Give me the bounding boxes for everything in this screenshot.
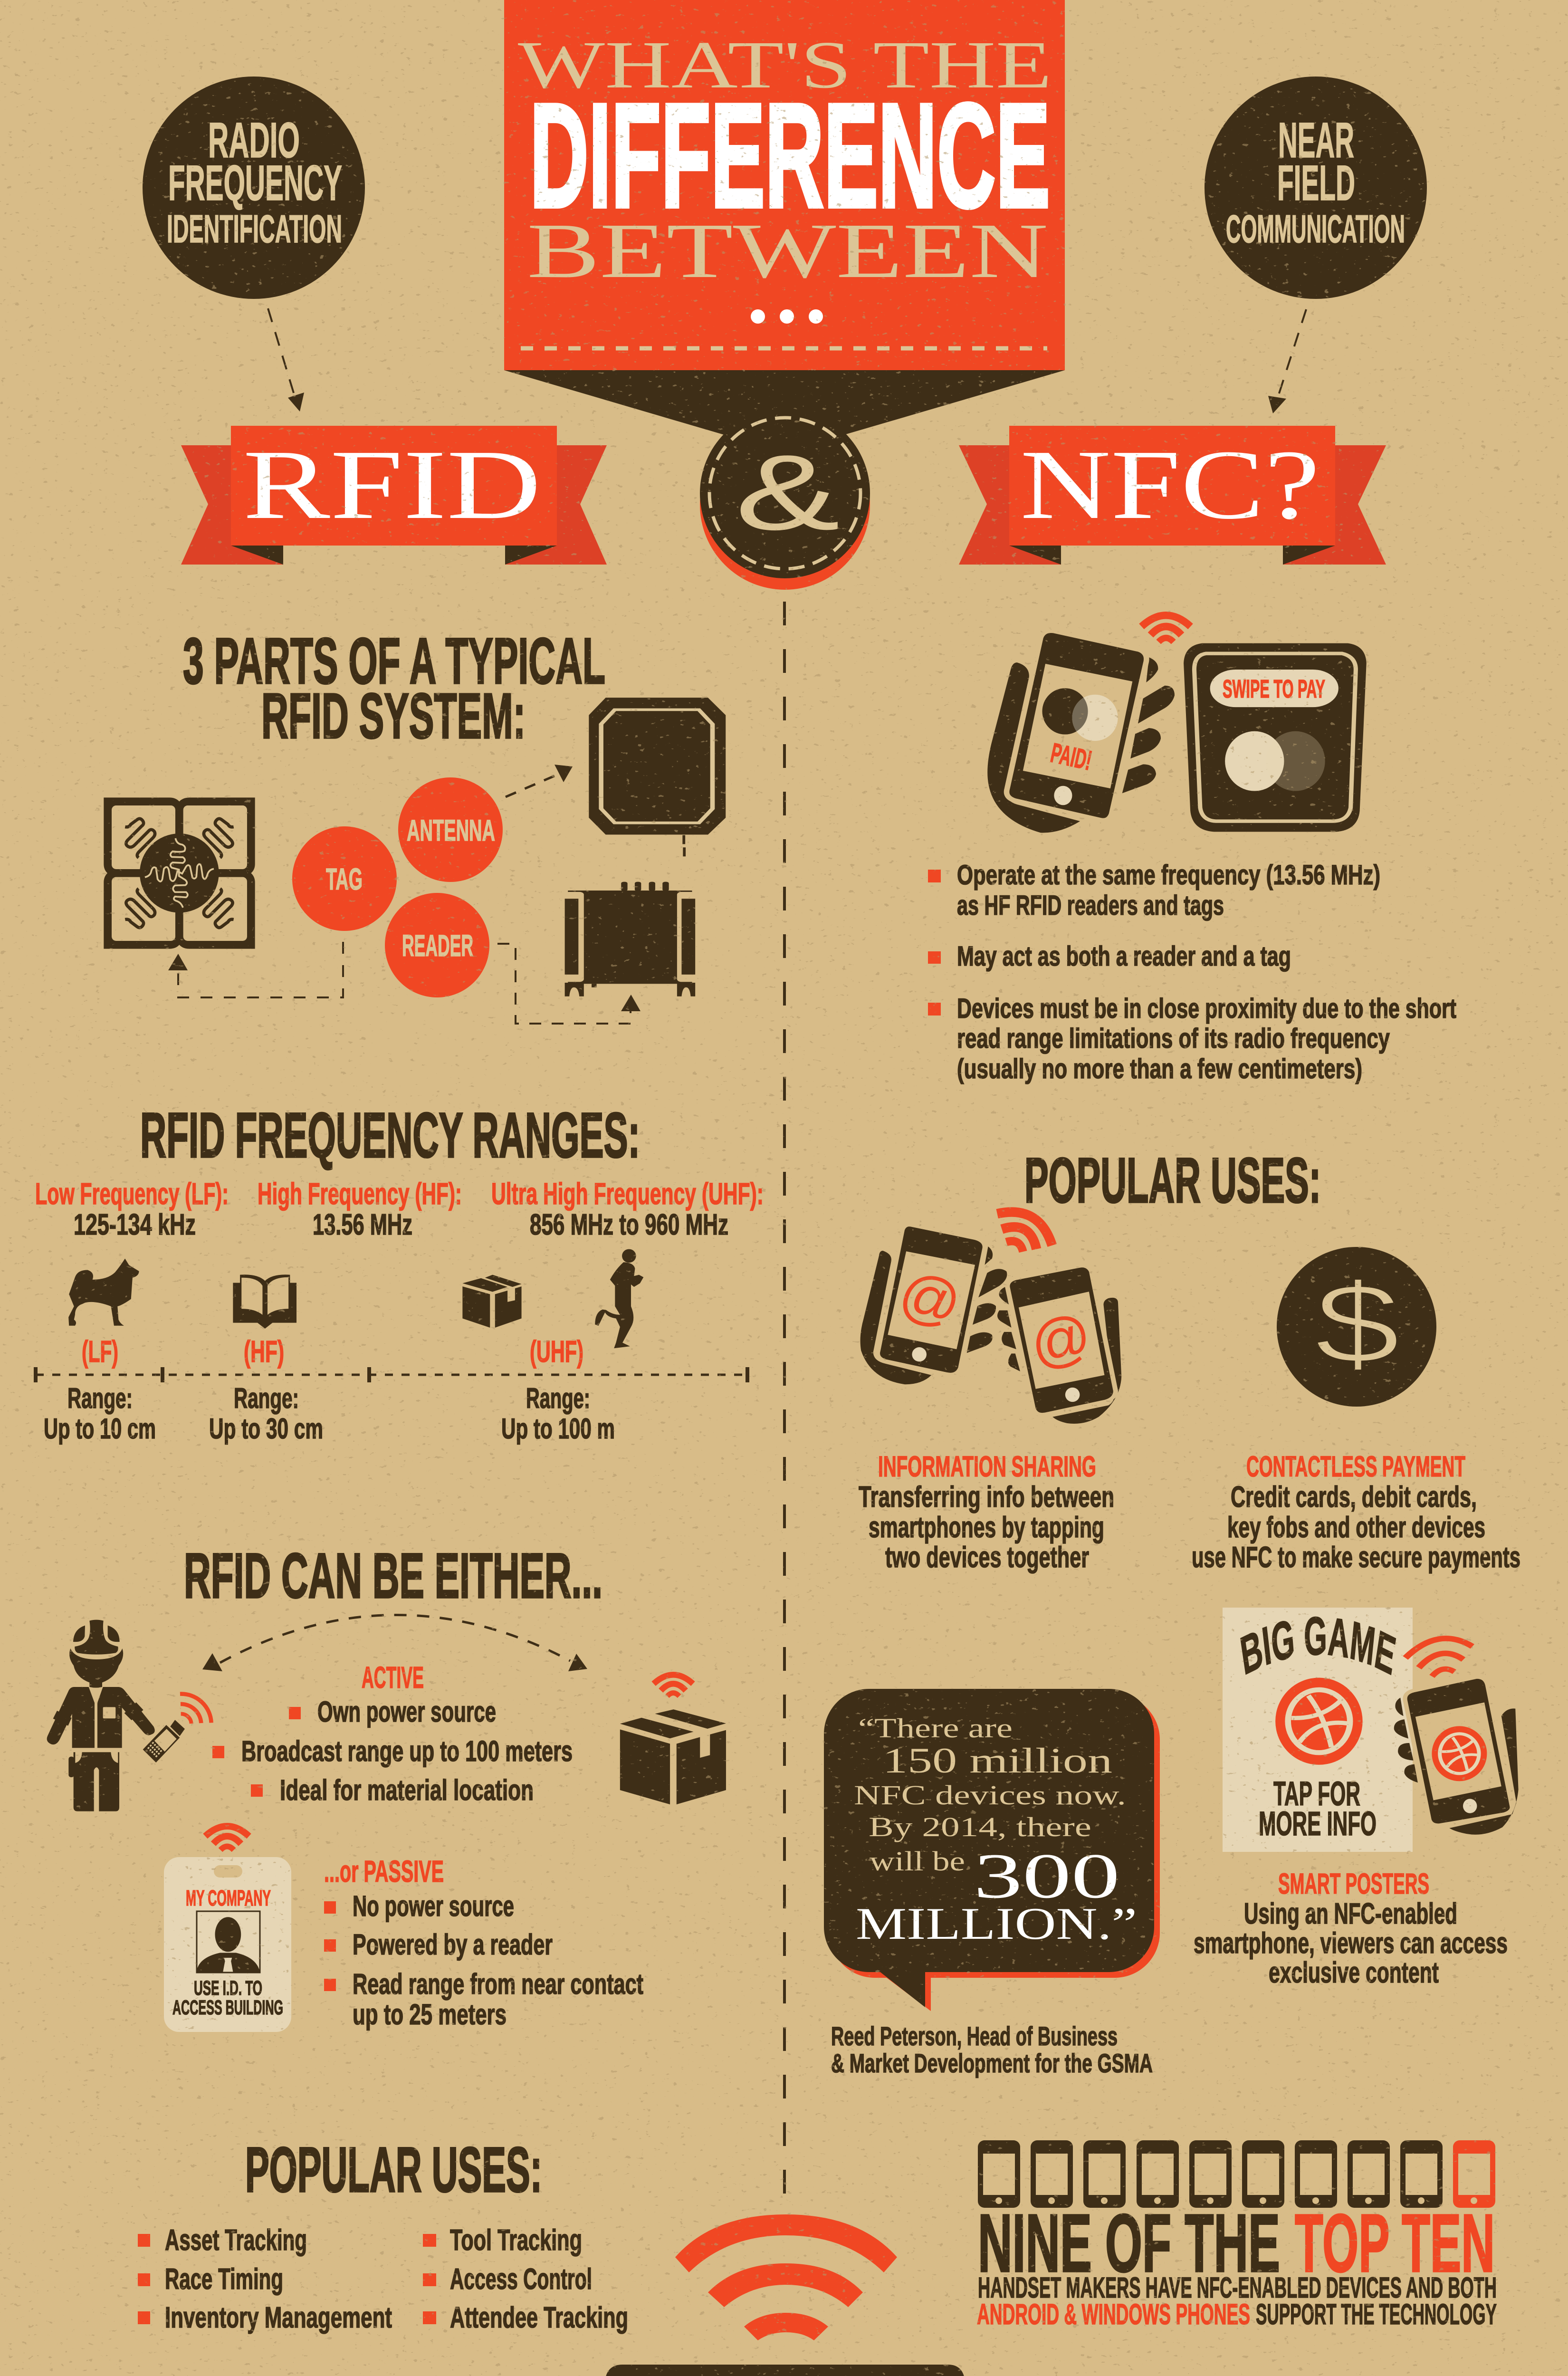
icon: payment terminal: SWIPE TO PAY [1223,675,1325,703]
quote bubble [824,1689,1160,2011]
center dashed divider [783,602,786,2195]
range values: Range: [67,1382,133,1414]
icon: large box [620,1709,726,1804]
icon: RFID tag inlay [104,797,255,949]
range timeline [36,1367,747,1382]
icon: antenna [589,698,726,856]
text: passive: No power source [353,1890,514,1922]
icon: ID badge: MY COMPANY [186,1886,271,1910]
text: active: Ideal for material location [280,1774,534,1806]
title line: between: BETWEEN [527,207,1048,294]
list: RFID uses: Access Control [450,2263,592,2296]
ampersand badge [700,408,870,590]
quote bubble: will be [870,1846,965,1877]
range values: Up to 10 cm [44,1413,156,1445]
range values: Up to 100 m [501,1413,615,1445]
text: smart posters [1194,1868,1508,1989]
circle: reader [385,893,489,997]
badge: radio frequency identification: IDENTIFICATION [167,207,342,251]
list: NFC facts: May act as both a reader and a tag [957,941,1291,972]
list: NFC facts: (usually no more than a few centimeters) [957,1054,1362,1084]
circle: tag: TAG [326,862,363,896]
arrow: curved between worker and box [202,1615,587,1671]
list: RFID uses: Race Timing [165,2263,283,2296]
badge: near field communication: FIELD [1277,155,1355,211]
icon: ID badge: USE I.D. TO [194,1977,262,2000]
ribbon: NFC [959,426,1386,565]
quote bubble: NFC devices now. [854,1780,1126,1811]
list: RFID uses: Inventory Management [165,2301,392,2334]
title line: difference: DIFFERENCE [530,73,1050,239]
circle: tag [292,826,397,931]
icon: phone in hand paying [987,631,1175,833]
ampersand badge: & [735,432,840,552]
text: smart posters: exclusive content [1269,1956,1439,1989]
circle: reader: READER [402,929,473,963]
text: at signs: @ [1024,1301,1097,1379]
arrow: antenna [506,765,573,797]
icon: row of ten phones [978,2140,1495,2208]
quote bubble: By 2014, there [869,1811,1091,1842]
badge: near field communication: COMMUNICATION [1226,207,1405,251]
heading: popular uses (NFC): POPULAR USES: [1024,1145,1321,1216]
list: NFC facts: Operate at the same frequency (13.56 MHz) [957,860,1380,891]
text: passive: ...or PASSIVE [324,1854,444,1888]
text: information sharing: smartphones by tapping [869,1511,1104,1544]
badge: radio frequency identification: FREQUENCY [168,155,342,211]
quote bubble: 150 million [883,1741,1112,1781]
text: active [212,1660,573,1806]
icon: large wifi [675,2214,897,2340]
title panel [504,0,1065,452]
text: passive [324,1854,643,2031]
icon: two phones sharing [860,1225,1121,1424]
text: information sharing: two devices together [885,1541,1089,1574]
text: smart posters: Using an NFC-enabled [1244,1897,1457,1930]
frequency labels: High Frequency (HF): [258,1177,462,1211]
arrow: to NFC [1268,309,1306,413]
heading: 3 parts [183,625,605,752]
icon: worker with scanner [47,1620,211,1811]
icon: dollar coin: $ [1314,1260,1400,1387]
list: RFID uses: Attendee Tracking [450,2301,628,2334]
ribbon: NFC: NFC? [1020,430,1320,540]
text: information sharing: INFORMATION SHARING [878,1450,1096,1483]
text: contactless payment [1192,1450,1520,1574]
three dots [751,309,823,324]
frequency labels: Ultra High Frequency (UHF): [491,1177,764,1211]
list: NFC facts: read range limitations of its radio frequency [957,1023,1390,1054]
circle: antenna [398,777,503,882]
text: active: ACTIVE [362,1660,424,1695]
frequency tier labels: (UHF) [530,1334,583,1369]
text: passive: Powered by a reader [353,1928,553,1961]
frequency labels [35,1177,764,1241]
list: RFID uses [138,2224,628,2334]
frequency labels: 856 MHz to 960 MHz [530,1208,728,1241]
icon: payment terminal [1184,643,1367,832]
text: nine of the top ten: NINE OF THE [978,2197,1280,2289]
text: smart posters: SMART POSTERS [1278,1868,1429,1900]
text: at signs [893,1259,1097,1379]
frequency labels: 13.56 MHz [313,1208,412,1241]
arrow: tag [168,942,343,997]
icon: dollar coin [1277,1247,1436,1407]
range values: Range: [526,1382,590,1414]
quote attribution: Reed Peterson, Head of Business [831,2021,1118,2051]
text: information sharing: Transferring info between [859,1481,1114,1514]
poster: big game: MORE INFO [1259,1805,1377,1843]
text: at signs: @ [893,1259,967,1338]
heading: frequency ranges: RFID FREQUENCY RANGES: [140,1100,640,1171]
quote bubble: MILLION.” [856,1898,1137,1949]
list: NFC facts [928,860,1456,1084]
icon: phone reading poster [1394,1638,1519,1835]
text: active: Own power source [317,1696,496,1728]
frequency labels: 125-134 kHz [74,1208,196,1241]
range values [44,1382,615,1445]
quote attribution [831,2021,1153,2078]
badge: near field communication [1205,77,1427,299]
heading: popular uses (RFID): POPULAR USES: [245,2135,542,2205]
quote bubble: 300 [974,1841,1120,1912]
frequency tier labels: (LF) [82,1334,118,1369]
arrow: reader [497,944,641,1024]
icon: wifi between phones [987,1201,1059,1263]
frequency tier labels: (HF) [244,1334,284,1369]
icon: reader [565,882,695,996]
icon: wifi over payment [1141,615,1191,642]
quote attribution: & Market Development for the GSMA [831,2048,1153,2078]
poster footer text: TAP FOR [1273,1775,1360,1813]
heading: RFID can be either: RFID CAN BE EITHER... [184,1541,602,1611]
arrow: to RFID [268,308,304,412]
list: RFID uses: Tool Tracking [450,2224,582,2257]
ribbon: RFID [181,426,607,565]
title line: what's the: WHAT'S THE [518,27,1052,102]
text: passive: Read range from near contact [353,1968,643,2000]
text: passive: up to 25 meters [353,1998,507,2031]
quote bubble: “There are [858,1713,1013,1744]
poster headline: BIG GAME [1237,1606,1399,1687]
text: active: Broadcast range up to 100 meters [241,1735,573,1767]
icon: wifi over box [654,1675,693,1696]
icon: book [233,1274,296,1329]
poster: big game [1223,1606,1413,1852]
icon: small box [462,1275,522,1328]
ribbon: RFID: RFID [243,430,541,540]
range values: Up to 30 cm [209,1413,323,1445]
icon: runner [595,1249,643,1348]
heading: 3 parts: 3 PARTS OF A TYPICAL [183,625,605,698]
circle: antenna: ANTENNA [407,814,495,847]
badge: radio frequency identification: RADIO [208,113,300,168]
heading: 3 parts: RFID SYSTEM: [261,680,526,752]
frequency tier labels [82,1334,583,1369]
footer [0,2365,1568,2376]
icon: dog [68,1258,139,1326]
icon: ID badge [164,1857,291,2032]
icon: wifi over badge [205,1826,249,1850]
badge: near field communication: NEAR [1278,113,1354,168]
list: RFID uses: Asset Tracking [165,2224,307,2257]
text: nine of the top ten [977,2197,1497,2330]
poster basketball [1275,1677,1363,1765]
range values: Range: [234,1382,299,1414]
frequency labels: Low Frequency (LF): [35,1177,229,1211]
text: paid: PAID! [1048,738,1095,776]
badge: radio frequency identification [143,77,365,299]
list: NFC facts: as HF RFID readers and tags [957,890,1224,921]
icon: ID badge: ACCESS BUILDING [172,1996,283,2019]
text: information sharing [859,1450,1114,1574]
text: nine of the top ten: ANDROID & WINDOWS PHONES [977,2298,1250,2330]
